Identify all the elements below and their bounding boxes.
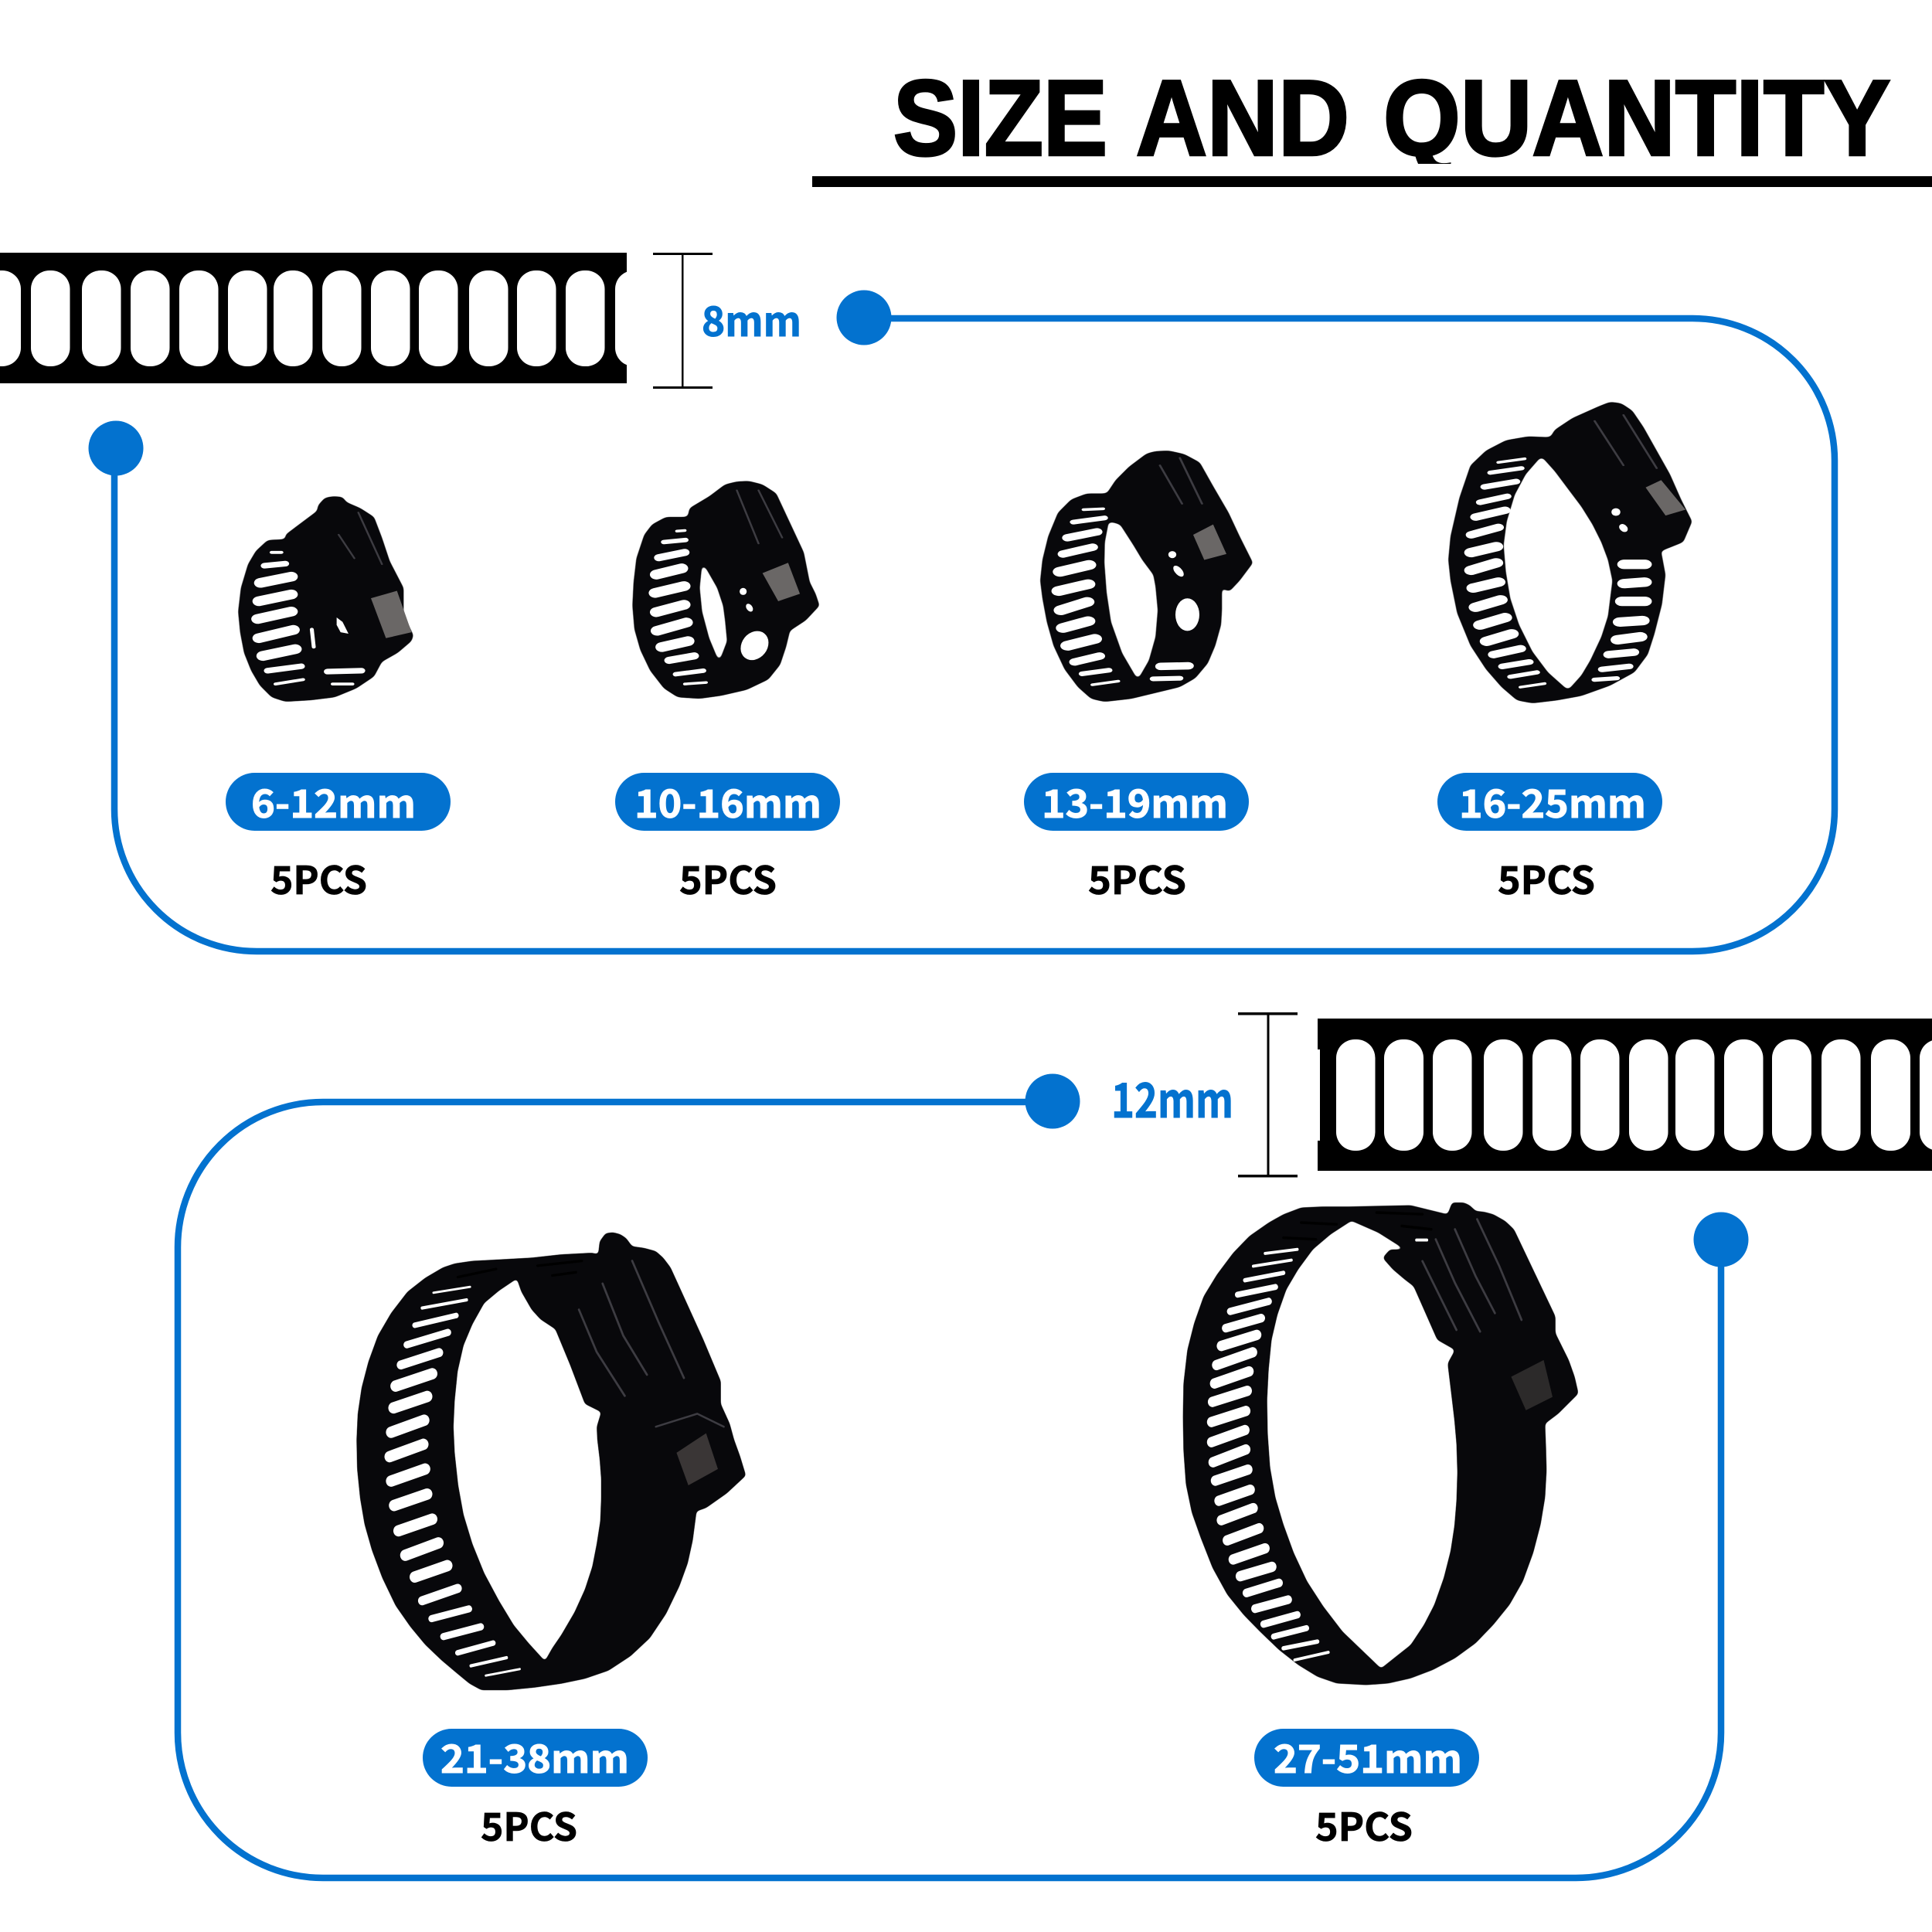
clamp 21-38mm [356,1233,746,1690]
8mm width label: 8mm [702,290,801,349]
pill: 16-25mm: 16-25mm [1459,774,1646,829]
pill: 10-16mm: 10-16mm [634,774,821,829]
pill: 6-12mm [226,773,451,831]
pill: 13-19mm: 13-19mm [1042,774,1228,829]
12mm panel outline with dots [178,1074,1748,1878]
quantity: 13-19mm: 5PCS [1088,850,1186,906]
12mm perforated band strip [1316,1019,1932,1171]
8mm perforated band strip [0,253,654,383]
title: size and quantity: AND [1136,59,1349,178]
clamp 13-19mm [1040,451,1253,702]
clamp 27-51mm [1183,1202,1579,1685]
title: size and quantity [812,79,1932,187]
quantity: 10-16mm: 5PCS [679,850,777,906]
quantity: 16-25mm: 5PCS [1498,850,1595,906]
8mm panel outline with dots [88,291,1835,951]
12mm width label: 12mm [1111,1062,1233,1131]
clamp 6-12mm [238,496,413,702]
title: size and quantity: QUANTITY [1383,59,1890,178]
pill: 6-12mm: 6-12mm [251,774,416,829]
quantity: 27-51mm: 5PCS [1315,1797,1413,1852]
panel: 12mm band clamps [178,1012,1932,1878]
pill: 21-38mm: 21-38mm [440,1729,629,1784]
panel: 8mm band clamps [0,253,1835,951]
title: size and quantity: SIZE [893,59,1107,178]
clamp 10-16mm [632,481,820,699]
pill: 27-51mm: 27-51mm [1274,1729,1462,1784]
12mm dimension bracket [1238,1012,1298,1178]
clamp 16-25mm [1448,402,1692,703]
quantity: 21-38mm: 5PCS [481,1797,577,1852]
quantity: 6-12mm: 5PCS [270,850,367,906]
8mm dimension bracket [653,253,713,389]
